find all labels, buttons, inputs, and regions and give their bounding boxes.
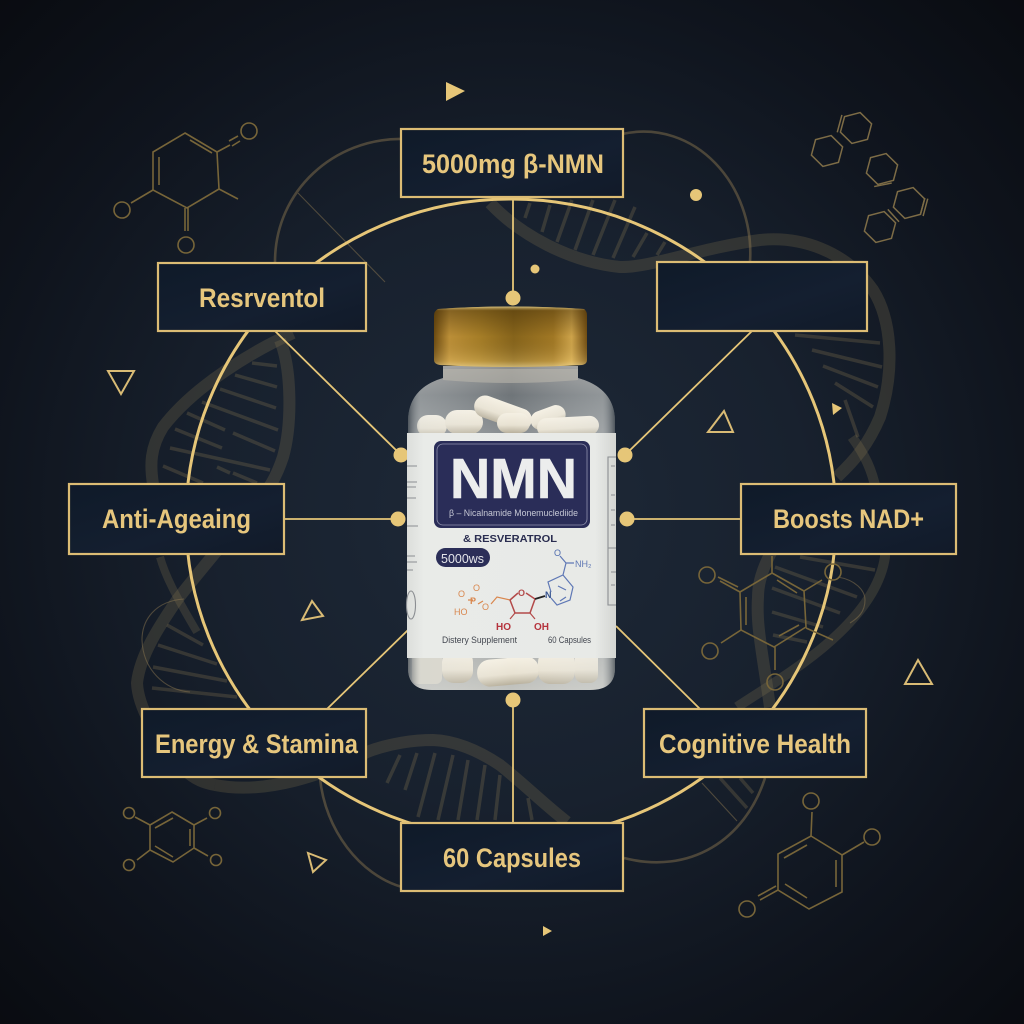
footer text: 60 Capsules <box>548 635 591 646</box>
molecule: top left <box>114 123 257 253</box>
glass jar <box>408 366 615 690</box>
triangle markers <box>108 82 932 936</box>
NMN molecule: O <box>554 548 561 558</box>
NMN molecule: OH <box>534 622 549 633</box>
NMN molecule: N <box>545 590 552 600</box>
box: 60 Capsules <box>401 823 623 891</box>
NMN molecule: P <box>470 596 476 606</box>
navy panel: β – Nicalnamide Monemuclediide <box>449 508 578 518</box>
footer text <box>442 635 591 646</box>
resveratrol text: & RESVERATROL <box>463 533 558 545</box>
box: Boosts NAD+: Boosts NAD+ <box>773 504 924 534</box>
main gold circle <box>186 199 836 839</box>
molecule: hexagon cluster <box>809 108 930 247</box>
navy panel <box>434 441 590 528</box>
box: Resrventol: Resrventol <box>199 283 325 313</box>
DNA helix: lower right <box>720 437 885 808</box>
cap <box>434 306 587 367</box>
molecule: right middle <box>699 556 841 690</box>
box: Resrventol <box>158 263 366 331</box>
floating dots <box>530 189 702 274</box>
box: Energy and Stamina <box>142 709 366 777</box>
box: Boosts NAD+ <box>741 484 956 554</box>
connector lines <box>275 197 752 823</box>
label <box>407 433 616 658</box>
glass edge shading <box>408 366 615 690</box>
NMN molecule: HO <box>454 607 468 617</box>
DNA helix: upper right <box>490 200 890 477</box>
NMN molecule: HO <box>496 622 511 633</box>
neck ring <box>443 369 578 383</box>
NMN molecule: O <box>482 602 489 612</box>
NMN molecule: NH₂ <box>575 559 592 569</box>
footer text: Distery Supplement <box>442 635 517 646</box>
box: 5000mg beta-NMN: 5000mg β-NMN <box>422 149 604 179</box>
capsules <box>412 392 599 688</box>
NMN molecule: O <box>518 588 525 598</box>
box: 5000mg beta-NMN <box>401 129 623 197</box>
dosage pill <box>436 548 490 567</box>
DNA helix: bottom wave <box>215 740 567 822</box>
navy panel: NMN <box>450 447 577 511</box>
box: empty <box>657 262 867 331</box>
box: Anti-Ageaing <box>69 484 284 554</box>
box: Cognitive Health: Cognitive Health <box>659 729 851 759</box>
label side details <box>406 457 616 619</box>
NMN molecule <box>454 548 592 633</box>
molecule: bottom right <box>739 793 880 917</box>
box: Anti-Ageaing: Anti-Ageaing <box>102 504 251 534</box>
box: 60 Capsules: 60 Capsules <box>443 843 581 873</box>
NMN molecule: O <box>458 589 465 599</box>
molecule: bottom left <box>124 808 222 870</box>
box: Energy and Stamina: Energy & Stamina <box>155 729 359 759</box>
box: Cognitive Health <box>644 709 866 777</box>
dosage pill: 5000ws <box>441 551 484 566</box>
node dots <box>390 290 634 708</box>
thin arcs <box>275 132 765 887</box>
supplement bottle <box>406 306 616 690</box>
DNA helix: left <box>137 333 293 785</box>
NMN molecule: O <box>473 583 480 593</box>
